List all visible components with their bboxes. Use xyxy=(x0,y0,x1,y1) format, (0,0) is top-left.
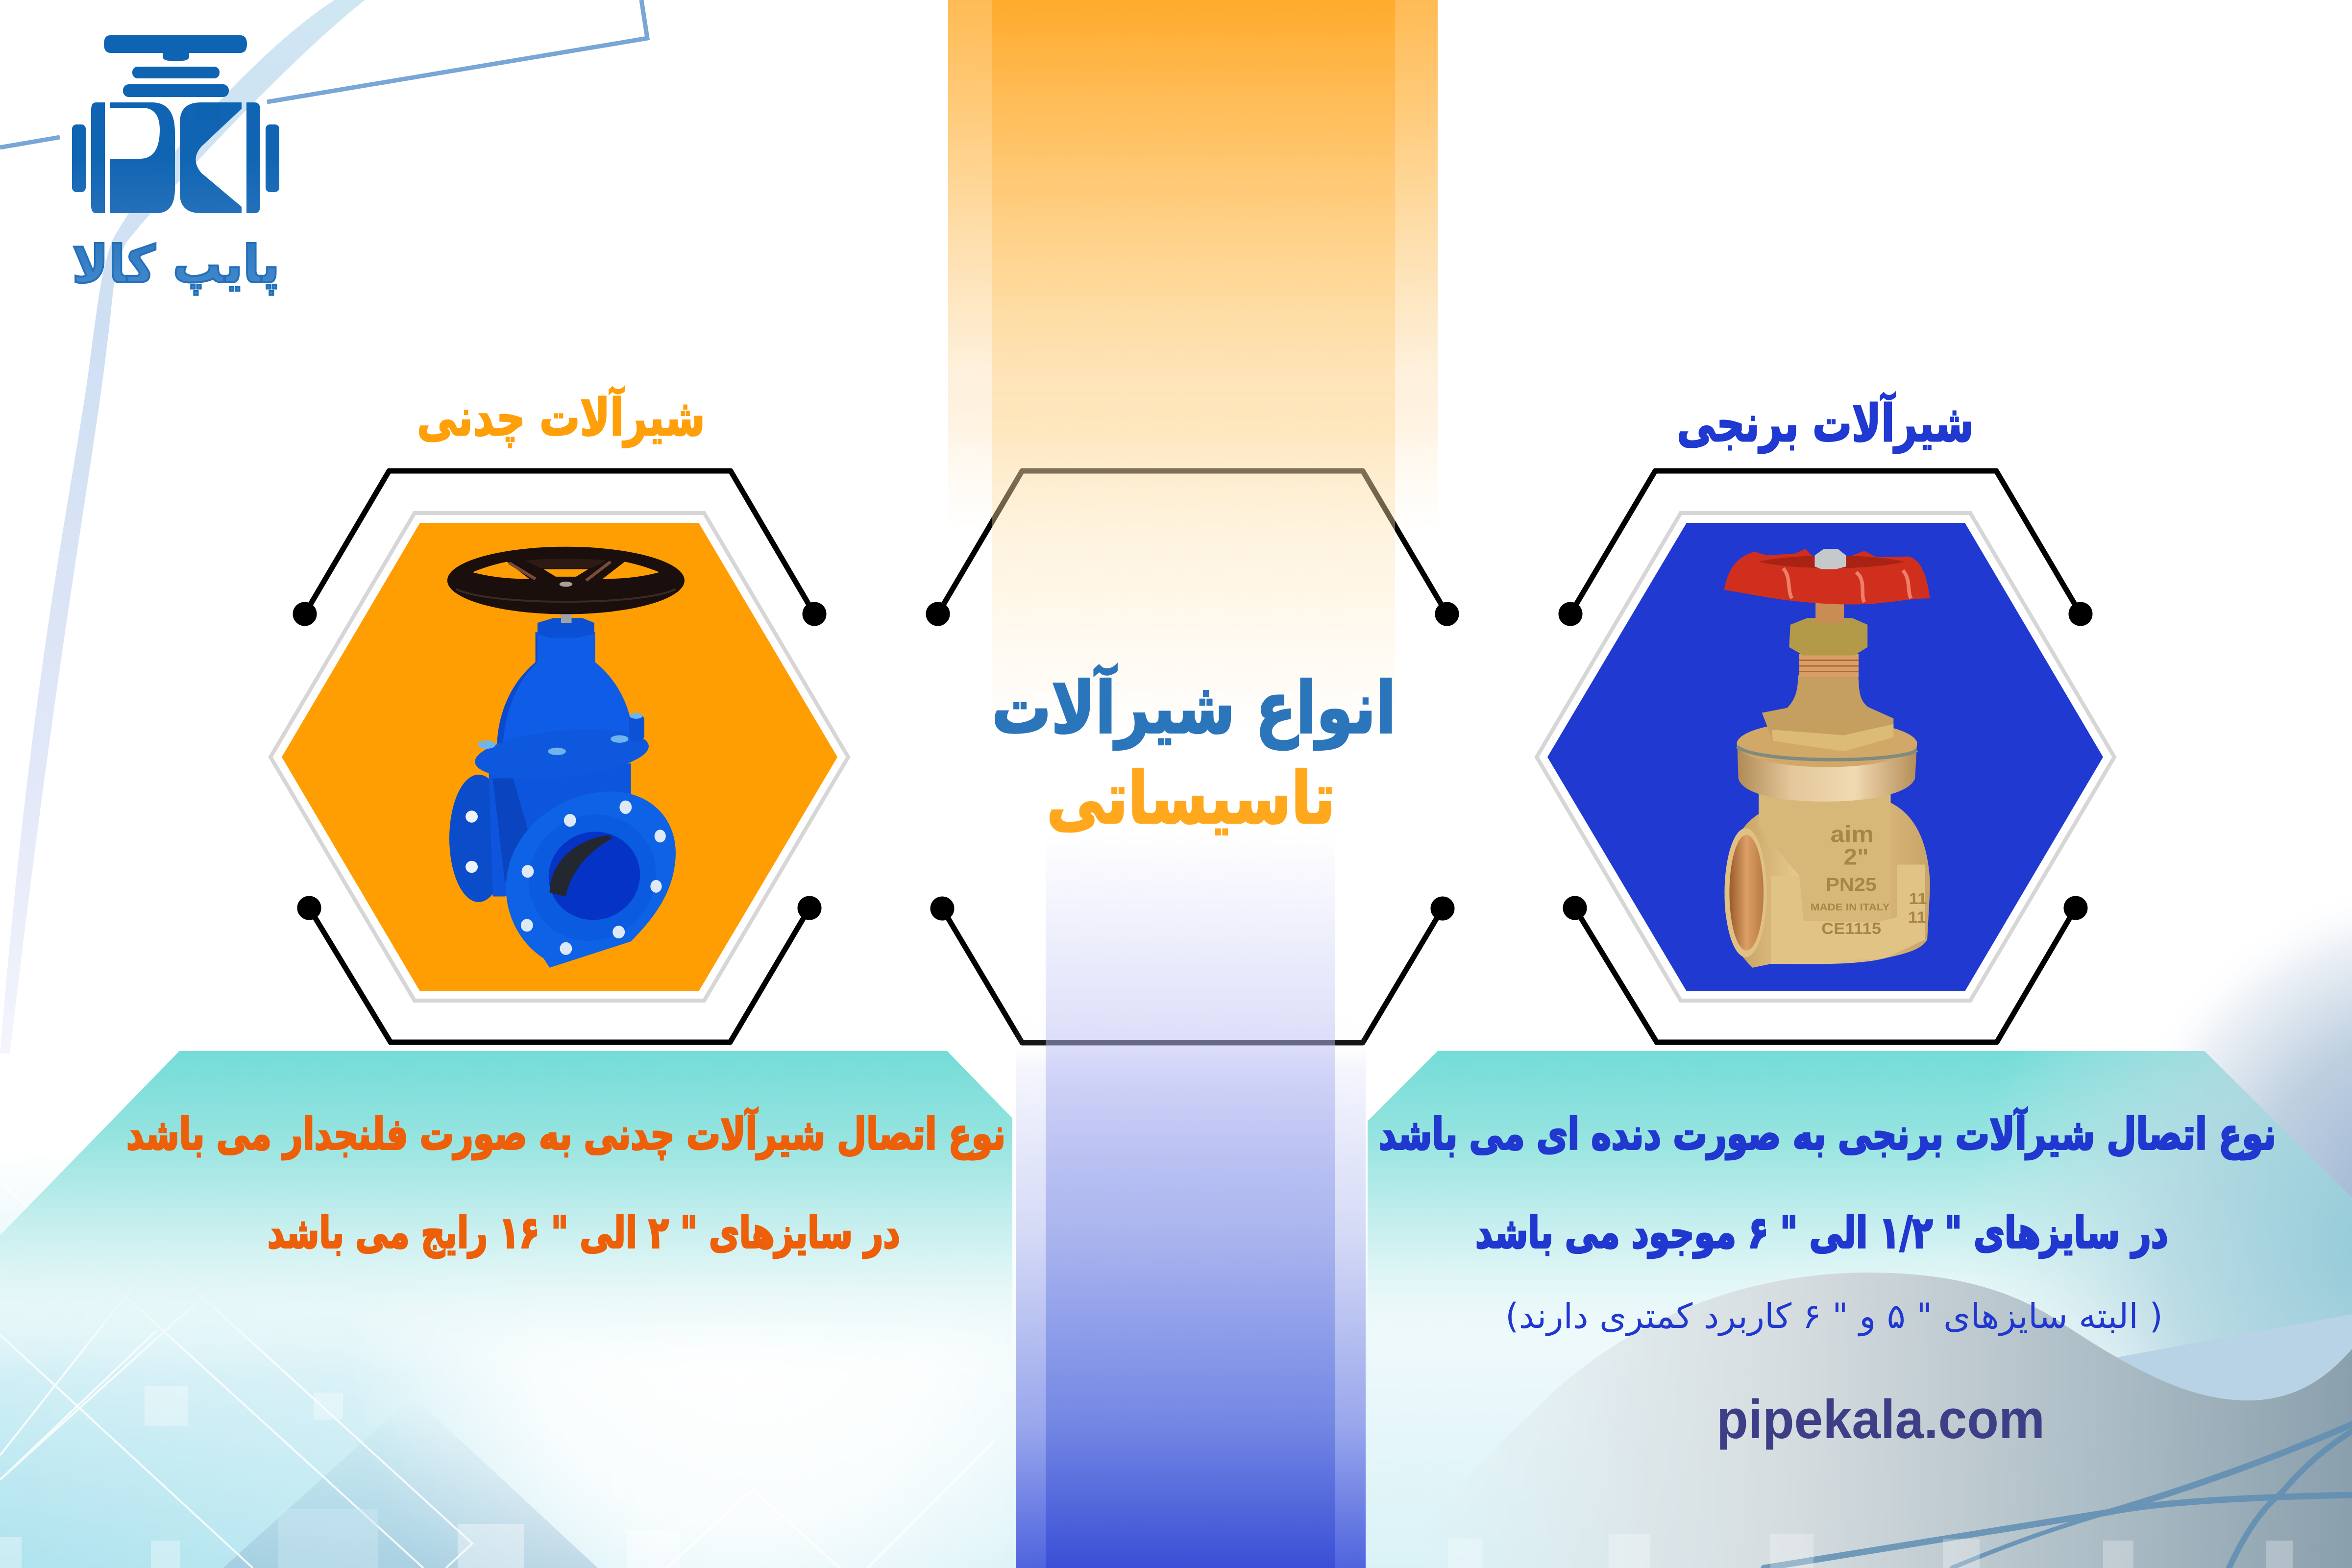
text block: left column: در سایزهای " ۲ الی " ۱۶ رایج می باشد xyxy=(268,1207,900,1258)
background: curved lines lower right xyxy=(1764,1424,2352,1568)
bonnet flange xyxy=(472,722,651,785)
hexagon outline: centre xyxy=(929,471,1456,1043)
text block: right column: ( البته سایزهای " ۵ و " ۶ کاربرد کمتری دارند) xyxy=(1505,1296,2163,1337)
blue stripe bottom xyxy=(1016,833,1366,1568)
background: geometric lines and squares lower left xyxy=(0,1182,995,1568)
hexagon: orange panel xyxy=(270,513,848,1001)
panel: right description background xyxy=(1368,1051,2352,1372)
background: squares lower right xyxy=(1448,1534,2293,1568)
logo wordmark: پایپ کالا xyxy=(72,235,280,295)
title: first line: انواع شیرآلات xyxy=(992,664,1396,750)
decorative arc top left xyxy=(0,0,365,1054)
hex cap xyxy=(1762,675,1893,751)
icon: cast iron gate valve xyxy=(447,547,685,968)
back flange xyxy=(449,775,508,902)
icon: valve mark xyxy=(72,35,279,213)
text block: left column xyxy=(126,1107,1005,1258)
heading: left column: شیرآلات چدنی xyxy=(417,386,705,448)
engraved marking: aim xyxy=(1831,821,1874,847)
decorative angular line top left xyxy=(0,0,647,147)
gland nut xyxy=(1789,618,1867,656)
top nut and stem xyxy=(538,618,594,638)
dome and neck xyxy=(497,632,633,750)
engraved marking: 11 xyxy=(1908,909,1926,927)
heading: right column: شیرآلات برنجی xyxy=(1677,392,1974,453)
red handle xyxy=(1724,549,1930,605)
body sides xyxy=(1725,803,1930,968)
orange stripe top: outer band xyxy=(948,0,1438,529)
hexagon: blue panel xyxy=(1537,513,2114,1001)
hexagon outline: right xyxy=(1561,471,2090,1042)
engraved marking: 2" xyxy=(1843,845,1869,870)
logo xyxy=(72,35,280,295)
text block: left column: نوع اتصال شیرآلات چدنی به صورت فلنجدار می باشد xyxy=(126,1107,1005,1160)
bolt holes xyxy=(521,801,666,955)
website address: pipekala.com xyxy=(1716,1389,2045,1450)
hexagon outline: left xyxy=(295,471,824,1042)
icon: brass gate valve xyxy=(1724,549,1930,968)
text block: right column xyxy=(1379,1107,2276,1337)
engraved marking: MADE IN ITALY xyxy=(1811,902,1889,913)
engraved marking: CE1115 xyxy=(1821,920,1881,938)
background: grey swoop lower right xyxy=(1396,1273,2352,1568)
bore xyxy=(1724,828,1767,957)
handwheel xyxy=(447,547,685,614)
stem xyxy=(1815,602,1844,623)
body xyxy=(489,763,631,896)
text block: right column: در سایزهای " ۱/۲ الی " ۶ موجود می باشد xyxy=(1475,1207,2168,1258)
orange stripe top: inner band xyxy=(992,0,1395,735)
engraved marking: 11 xyxy=(1909,890,1927,907)
panel: left description background xyxy=(0,1051,1012,1372)
engraved marking xyxy=(1811,821,1927,938)
thread xyxy=(1799,654,1859,677)
panel tint right side xyxy=(1813,1051,2352,1400)
cylinder xyxy=(1737,741,1917,802)
front flange xyxy=(506,791,676,968)
engraved marking: PN25 xyxy=(1826,874,1877,895)
background: blue band above swoop xyxy=(2117,1314,2352,1400)
handle nut xyxy=(1815,549,1846,569)
title: second line: تاسیساتی xyxy=(1047,757,1335,840)
